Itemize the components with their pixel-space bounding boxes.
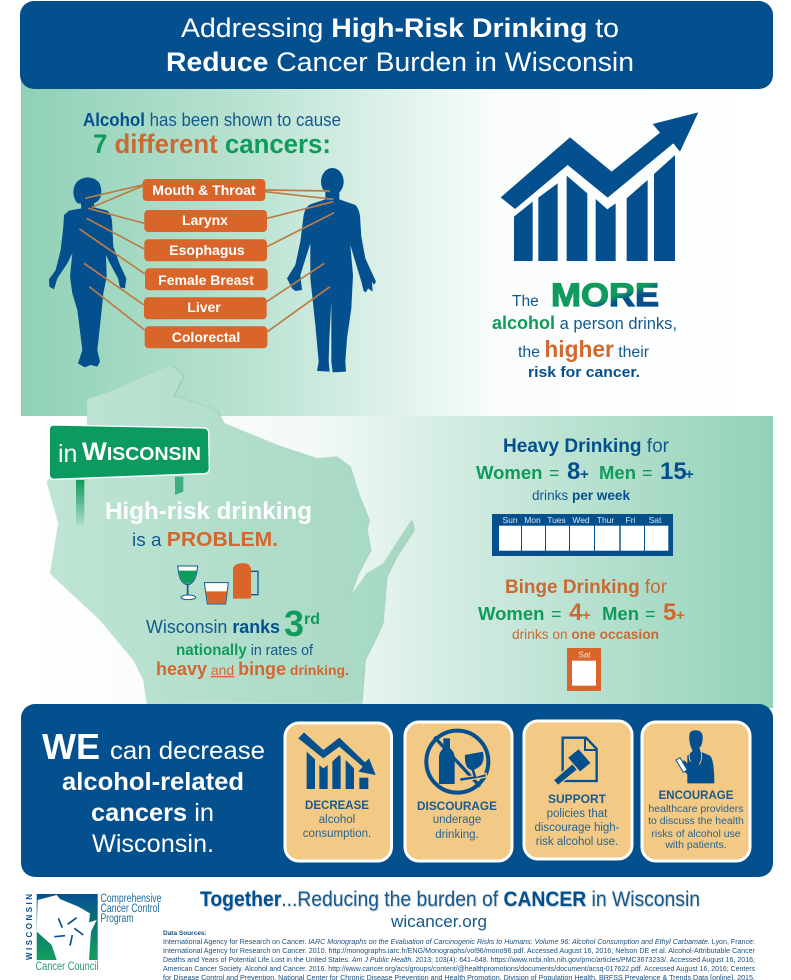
card: encourage: to discuss the health bbox=[648, 815, 744, 827]
card: support: policies that bbox=[547, 808, 608, 820]
text: the more alcohol, the higher the risk: the higher their bbox=[518, 336, 650, 362]
icon: falling chart bbox=[298, 732, 376, 789]
weekly calendar: Wed bbox=[572, 515, 590, 525]
text: heavy drinking definition: 15 bbox=[660, 458, 687, 485]
icon: in Wisconsin road sign bbox=[49, 425, 209, 525]
label: Esophagus: Esophagus bbox=[169, 242, 245, 258]
logo: Wisconsin Comprehensive Cancer Control Program: Comprehensive bbox=[100, 893, 162, 905]
wine glass bbox=[178, 566, 198, 600]
text: we can decrease alcohol-related cancers: alcohol-related bbox=[62, 768, 244, 796]
weekly calendar: Tues bbox=[547, 515, 566, 525]
text: heavy drinking definition: Women bbox=[476, 462, 542, 483]
text: heavy drinking definition: Men bbox=[599, 462, 636, 483]
label: Colorectal bbox=[145, 326, 267, 348]
text: binge drinking definition: drinks on one occasion bbox=[512, 627, 659, 642]
text: the more alcohol, the higher the risk: risk for cancer. bbox=[528, 364, 640, 381]
text: Wisconsin ranks 3rd: heavy and binge drinking. bbox=[156, 659, 349, 679]
text: we can decrease alcohol-related cancers bbox=[42, 726, 265, 858]
text: data sources bbox=[163, 930, 756, 980]
text: binge drinking definition: Women bbox=[478, 603, 544, 624]
card: discourage: DISCOURAGE bbox=[417, 799, 497, 813]
icon: in Wisconsin road sign: WISCONSIN bbox=[82, 438, 201, 466]
card: encourage: risks of alcohol use bbox=[651, 828, 741, 840]
title banner bbox=[20, 1, 773, 89]
card: support: discourage high- bbox=[534, 822, 620, 834]
map: Wisconsin state shape bbox=[47, 365, 414, 703]
icon: document and gavel bbox=[553, 738, 597, 786]
logo: Wisconsin Comprehensive Cancer Control Program bbox=[25, 893, 162, 973]
beer mug bbox=[233, 563, 258, 599]
text: heavy drinking definition: + bbox=[580, 466, 589, 483]
tagline bbox=[200, 888, 700, 931]
weekly calendar bbox=[492, 514, 673, 556]
label: Liver bbox=[144, 297, 267, 319]
icon: rising bar chart with arrow bbox=[501, 112, 698, 261]
text: heavy drinking definition: = bbox=[549, 463, 560, 483]
text: the more alcohol, the higher the risk bbox=[492, 277, 677, 381]
text: the more alcohol, the higher the risk: alcohol a person drinks, bbox=[492, 313, 677, 333]
text: the more alcohol, the higher the risk: MORE bbox=[551, 277, 659, 313]
text: data sources: Deaths and Years of Potential Life Lost in the United States. Am J Public Health. 2013; 103(4): 641–648. https://www.ncbi.nlm.nih.gov/pmc/articles/PMC3673233/. Accessed August 16, 2016; bbox=[163, 957, 755, 964]
text: high-risk drinking is a problem: is a PROBLEM. bbox=[132, 529, 278, 551]
logo: Wisconsin Comprehensive Cancer Control Program: Program bbox=[100, 913, 134, 925]
panel: middle section background bbox=[21, 416, 773, 708]
rocks glass bbox=[204, 583, 228, 604]
text: binge drinking definition: 4 bbox=[569, 599, 583, 626]
text: data sources: Data Sources: bbox=[163, 930, 207, 937]
text: heavy drinking definition: drinks per week bbox=[532, 488, 630, 503]
text: we can decrease alcohol-related cancers: cancers in bbox=[91, 799, 214, 827]
label: Larynx bbox=[144, 210, 267, 232]
label: Colorectal: Colorectal bbox=[172, 329, 240, 345]
text: heavy drinking definition: Heavy Drinking for bbox=[503, 436, 670, 457]
text: high-risk drinking is a problem bbox=[105, 498, 312, 551]
tagline: wicancer.org bbox=[390, 912, 487, 931]
diagram: body silhouettes and cancer sites bbox=[49, 168, 376, 372]
card: encourage: ENCOURAGE bbox=[659, 790, 734, 802]
text: binge drinking definition: Binge Drinking for bbox=[505, 577, 668, 598]
logo: Wisconsin Comprehensive Cancer Control Program: Cancer Control bbox=[100, 903, 160, 915]
title banner: Reduce Cancer Burden in Wisconsin bbox=[166, 47, 634, 77]
card: discourage bbox=[405, 722, 512, 861]
text: Wisconsin ranks 3rd: 3 bbox=[284, 603, 304, 644]
text: binge drinking definition bbox=[478, 577, 685, 642]
text: the more alcohol, the higher the risk: The bbox=[512, 293, 539, 310]
weekly calendar: Sun bbox=[502, 515, 518, 525]
label: Female Breast bbox=[145, 268, 268, 290]
text: Wisconsin ranks 3rd: Wisconsin ranks bbox=[146, 617, 280, 637]
text: binge drinking definition: + bbox=[676, 607, 685, 624]
weekly calendar: Thur bbox=[597, 515, 614, 525]
weekly calendar: Fri bbox=[626, 515, 636, 525]
text: binge drinking definition: = bbox=[645, 604, 656, 624]
text: high-risk drinking is a problem: High-risk drinking bbox=[105, 498, 312, 525]
card: discourage: drinking. bbox=[435, 829, 479, 841]
tagline: Together...Reducing the burden of CANCER in Wisconsin bbox=[200, 888, 700, 911]
icon: doctor with clipboard bbox=[676, 730, 714, 783]
label: Mouth & Throat: Mouth & Throat bbox=[152, 182, 256, 198]
logo: Wisconsin Comprehensive Cancer Control Program: Cancer Council bbox=[36, 961, 98, 973]
text: heavy drinking definition: 8 bbox=[567, 458, 580, 485]
text: we can decrease alcohol-related cancers: can decrease bbox=[110, 737, 265, 765]
text: Wisconsin ranks 3rd: rd bbox=[304, 611, 320, 628]
text: heavy drinking definition bbox=[476, 436, 694, 503]
card: decrease: consumption. bbox=[303, 828, 371, 840]
card: decrease: alcohol bbox=[319, 814, 355, 826]
single-day calendar bbox=[567, 648, 601, 691]
text: heavy drinking definition: = bbox=[642, 463, 653, 483]
single-day calendar: Sat bbox=[578, 650, 591, 660]
text: Wisconsin ranks 3rd: nationally in rates of bbox=[176, 642, 314, 659]
text: we can decrease alcohol-related cancers: Wisconsin. bbox=[92, 830, 214, 858]
text: heavy drinking definition: + bbox=[685, 466, 694, 483]
text: binge drinking definition: 5 bbox=[663, 599, 676, 626]
text: binge drinking definition: = bbox=[551, 604, 562, 624]
icon: no bottle and glass bbox=[426, 731, 488, 793]
card: support: risk alcohol use. bbox=[536, 836, 618, 848]
panel: top section background bbox=[21, 80, 773, 416]
label: Larynx: Larynx bbox=[182, 212, 228, 228]
card: support: SUPPORT bbox=[548, 792, 607, 806]
text: Wisconsin ranks 3rd bbox=[146, 603, 349, 679]
icon: female silhouette bbox=[49, 177, 126, 367]
label: Mouth & Throat bbox=[143, 179, 265, 201]
panel: we can decrease bbox=[21, 704, 773, 877]
text: we can decrease alcohol-related cancers: WE bbox=[42, 726, 100, 767]
card: discourage: underage bbox=[433, 814, 481, 826]
label: Esophagus bbox=[144, 239, 267, 261]
icon: male silhouette bbox=[287, 168, 376, 372]
card: encourage bbox=[642, 722, 750, 861]
connector lines bbox=[79, 185, 334, 332]
weekly calendar: Mon bbox=[524, 515, 541, 525]
card: encourage: with patients. bbox=[664, 839, 727, 851]
text: binge drinking definition: Men bbox=[602, 603, 639, 624]
icon: in Wisconsin road sign: in bbox=[58, 440, 77, 468]
weekly calendar: Sat bbox=[649, 515, 662, 525]
card: support bbox=[524, 721, 632, 859]
heading: seven cancers: Alcohol has been shown to cause bbox=[83, 109, 341, 130]
title banner: Addressing High-Risk Drinking to bbox=[181, 13, 619, 43]
heading: seven cancers bbox=[83, 109, 341, 159]
card: decrease bbox=[285, 723, 392, 861]
card: encourage: healthcare providers bbox=[648, 803, 744, 815]
icon: drink glasses bbox=[178, 563, 258, 604]
card: decrease: DECREASE bbox=[305, 800, 369, 812]
logo: Wisconsin Comprehensive Cancer Control Program: WISCONSIN bbox=[25, 894, 34, 960]
text: data sources: American Cancer Society. Alcohol and Cancer. 2016. http://www.cancer.org/acs/groups/content/@healthpromotions/documents/document/acsq-017622.pdf. Accessed August 16, 2016; Centers bbox=[163, 966, 755, 973]
text: binge drinking definition: + bbox=[582, 607, 591, 624]
text: data sources: International Agency for Research on Cancer. IARC Monographs on the Evaluation of Carcinogenic Risks to Humans: Volume 96: Alcohol Consumption and Ethyl Carbamate. Lyon, France: bbox=[163, 939, 755, 946]
heading: seven cancers: 7 different cancers: bbox=[93, 129, 331, 159]
label: Female Breast: Female Breast bbox=[158, 272, 254, 288]
label: Liver: Liver bbox=[187, 299, 221, 315]
text: data sources: International Agency for Research on Cancer. 2010. http://monographs.iarc.fr/ENG/Monographs/vol96/mono96.pdf. Accessed August 16, 2016; Nelson DE et al. Alcohol-Attributable Cancer bbox=[163, 948, 756, 955]
